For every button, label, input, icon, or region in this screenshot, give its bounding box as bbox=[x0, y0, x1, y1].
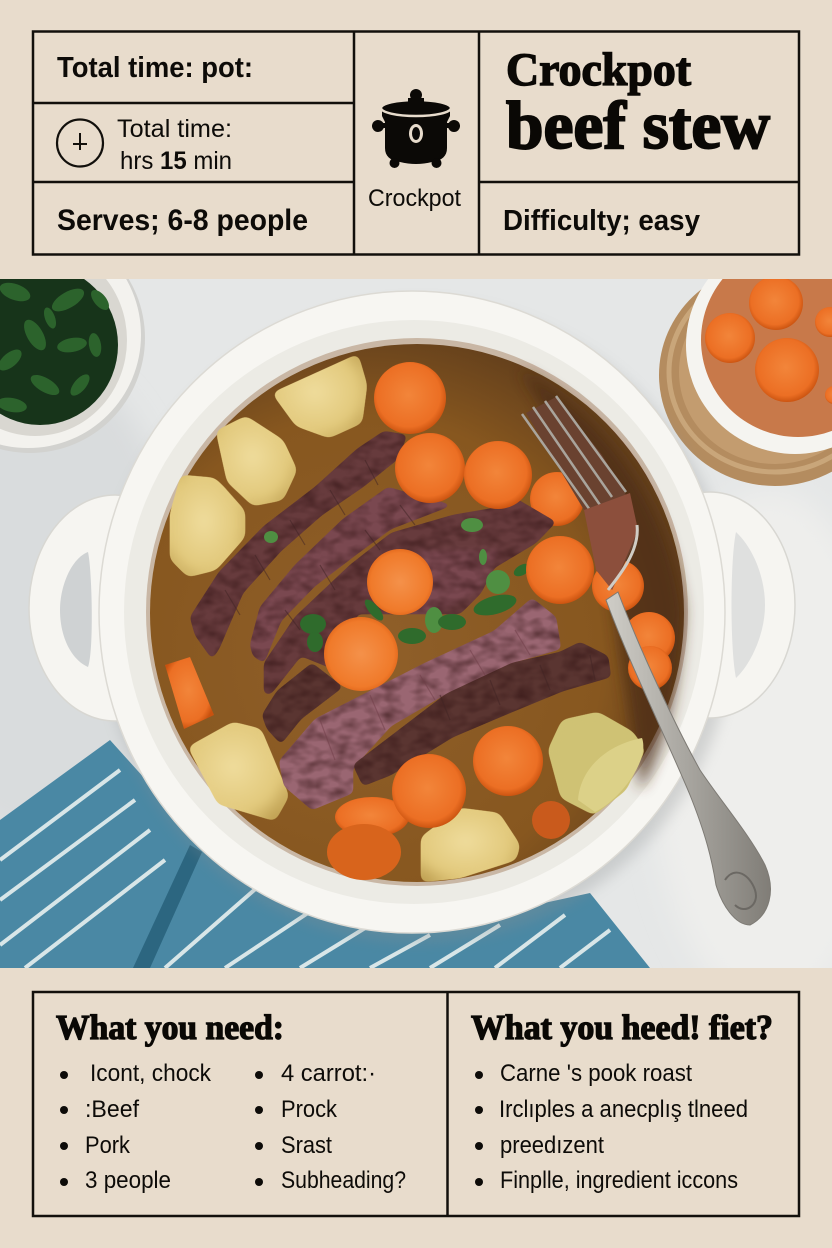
title: beef stew bbox=[506, 87, 770, 163]
blue striped towel bbox=[0, 740, 650, 968]
list column two bbox=[255, 1060, 406, 1194]
list column two: Subheading? bbox=[281, 1167, 406, 1194]
ingredients table bbox=[33, 992, 799, 1216]
carrots behind meat bbox=[165, 362, 675, 880]
list column three: Carne 's pook roast bbox=[500, 1060, 692, 1087]
total time pot label: Total time: pot: bbox=[57, 52, 253, 84]
pot handle right bbox=[704, 492, 796, 718]
list column three: preedızent bbox=[500, 1132, 604, 1159]
bowl of carrots on wood trivet bbox=[659, 279, 832, 486]
list column one: Pork bbox=[85, 1132, 131, 1159]
pot handle left bbox=[28, 494, 120, 722]
list column two: Srast bbox=[281, 1132, 332, 1159]
list column one bbox=[60, 1060, 212, 1194]
list column two: 4 carrot:· bbox=[281, 1060, 376, 1087]
list column one: :Beef bbox=[85, 1096, 139, 1123]
list column one: Icont, chock bbox=[90, 1060, 212, 1087]
fork bbox=[522, 396, 770, 925]
list column three: Finplle, ingredient iccons bbox=[500, 1167, 738, 1194]
list column one: 3 people bbox=[85, 1167, 171, 1194]
title bbox=[506, 44, 770, 163]
carrots on top bbox=[324, 433, 594, 828]
list column two: Prock bbox=[281, 1096, 338, 1123]
list column three: Irclıples a anecplış tlneed bbox=[499, 1096, 748, 1123]
pot shadow bbox=[115, 384, 724, 946]
sliced beef bbox=[190, 431, 611, 810]
herb garnish bbox=[264, 518, 532, 652]
list column three bbox=[475, 1060, 748, 1194]
total time text: hrs 15 min bbox=[120, 147, 232, 175]
bowl of chopped herbs bbox=[0, 279, 145, 453]
difficulty label: Difficulty; easy bbox=[503, 205, 700, 237]
serves label: Serves; 6-8 people bbox=[57, 204, 308, 237]
total time text bbox=[117, 115, 232, 175]
pot body bbox=[99, 291, 725, 933]
header info table bbox=[33, 31, 799, 255]
heading: what you heed fiet: What you heed! fiet? bbox=[471, 1008, 773, 1047]
photo: beef stew in white pot bbox=[0, 279, 832, 968]
title: Crockpot bbox=[506, 44, 691, 96]
icon: clock bbox=[57, 120, 103, 166]
stew broth bbox=[150, 344, 684, 882]
potato highlight bbox=[578, 738, 643, 812]
potatoes bbox=[170, 354, 645, 882]
heading: what you need: What you need: bbox=[56, 1008, 284, 1047]
crockpot caption: Crockpot bbox=[368, 185, 461, 212]
icon: crockpot bbox=[372, 89, 460, 168]
total time text: Total time: bbox=[117, 115, 232, 143]
